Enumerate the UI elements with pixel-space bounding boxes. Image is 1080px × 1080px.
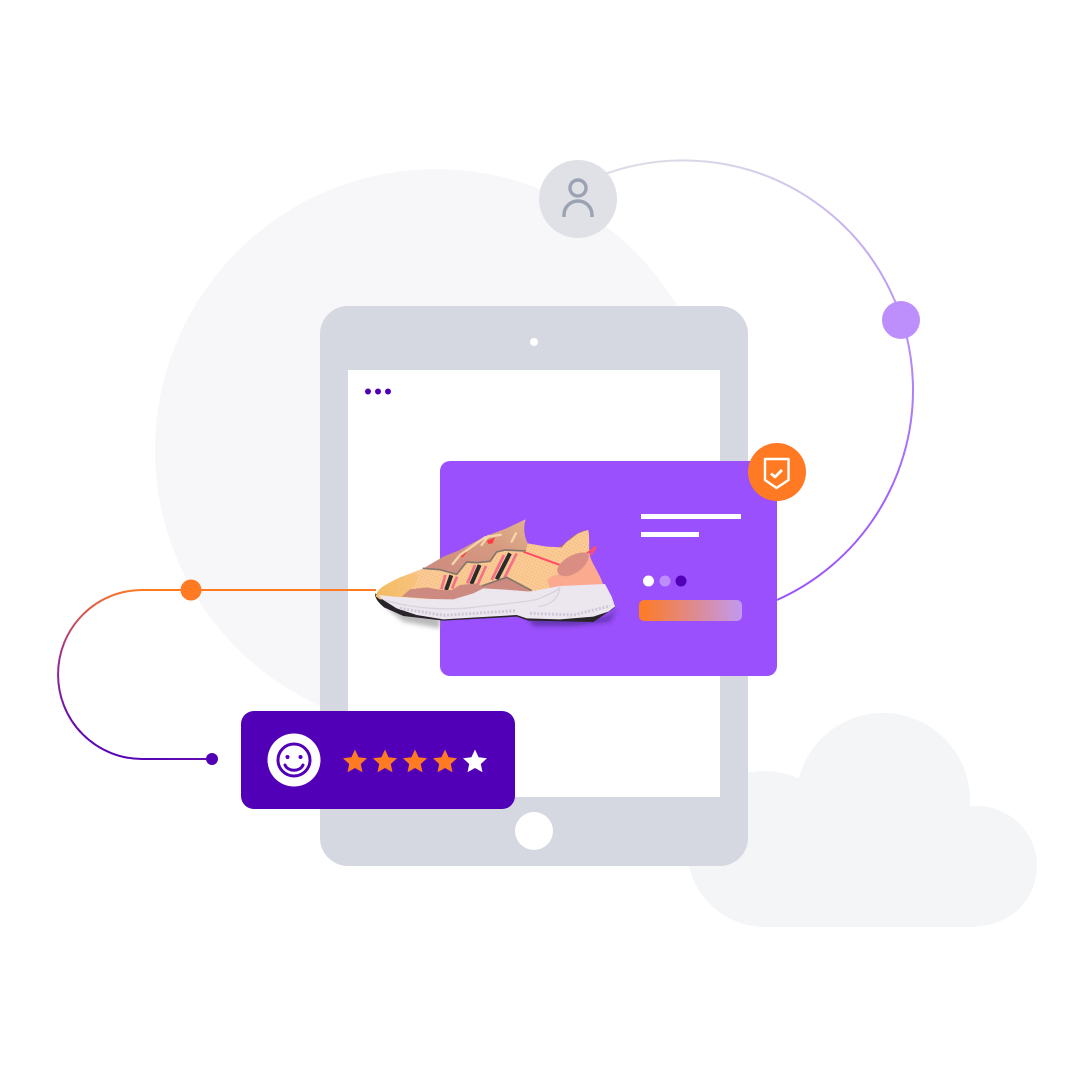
user avatar	[539, 160, 617, 238]
connector node: orange	[180, 580, 202, 600]
tablet	[320, 306, 748, 866]
icon: shield check	[765, 459, 788, 488]
rating card	[241, 711, 515, 809]
connector arc: user to product card	[605, 160, 913, 600]
heel patch	[557, 552, 589, 576]
neon pull line	[523, 547, 596, 565]
shield badge	[748, 443, 806, 501]
icon: person	[564, 180, 592, 217]
connector node: purple	[206, 753, 218, 765]
stripes	[441, 553, 517, 590]
upper	[376, 519, 603, 602]
collar lining	[559, 530, 588, 547]
buy button	[639, 600, 742, 621]
side overlay trim	[482, 577, 532, 591]
connector path: shoe to rating	[58, 590, 376, 759]
toe cap	[376, 573, 418, 598]
shoe	[375, 519, 617, 628]
outsole	[375, 593, 615, 622]
midsole	[378, 584, 615, 619]
background circle	[155, 169, 717, 731]
toe and side overlay	[402, 577, 532, 601]
red lace windows	[460, 537, 495, 557]
connector node: lilac	[882, 301, 920, 339]
product card	[440, 461, 777, 676]
laces	[453, 533, 516, 564]
smiley badge	[268, 734, 320, 786]
stitch trim	[423, 550, 526, 574]
cloud	[687, 713, 1037, 927]
shoe shadows	[383, 605, 617, 628]
tablet camera	[530, 338, 538, 346]
screen menu dots	[365, 388, 391, 394]
icon: smiley face	[278, 744, 310, 776]
heel panel	[547, 555, 604, 591]
tablet home button	[515, 812, 553, 850]
text placeholder lines	[641, 514, 741, 537]
midsole detail	[385, 587, 610, 615]
colour options	[643, 576, 686, 586]
stars	[343, 750, 487, 772]
tablet screen	[348, 370, 720, 797]
tongue and lace panel	[423, 519, 528, 574]
